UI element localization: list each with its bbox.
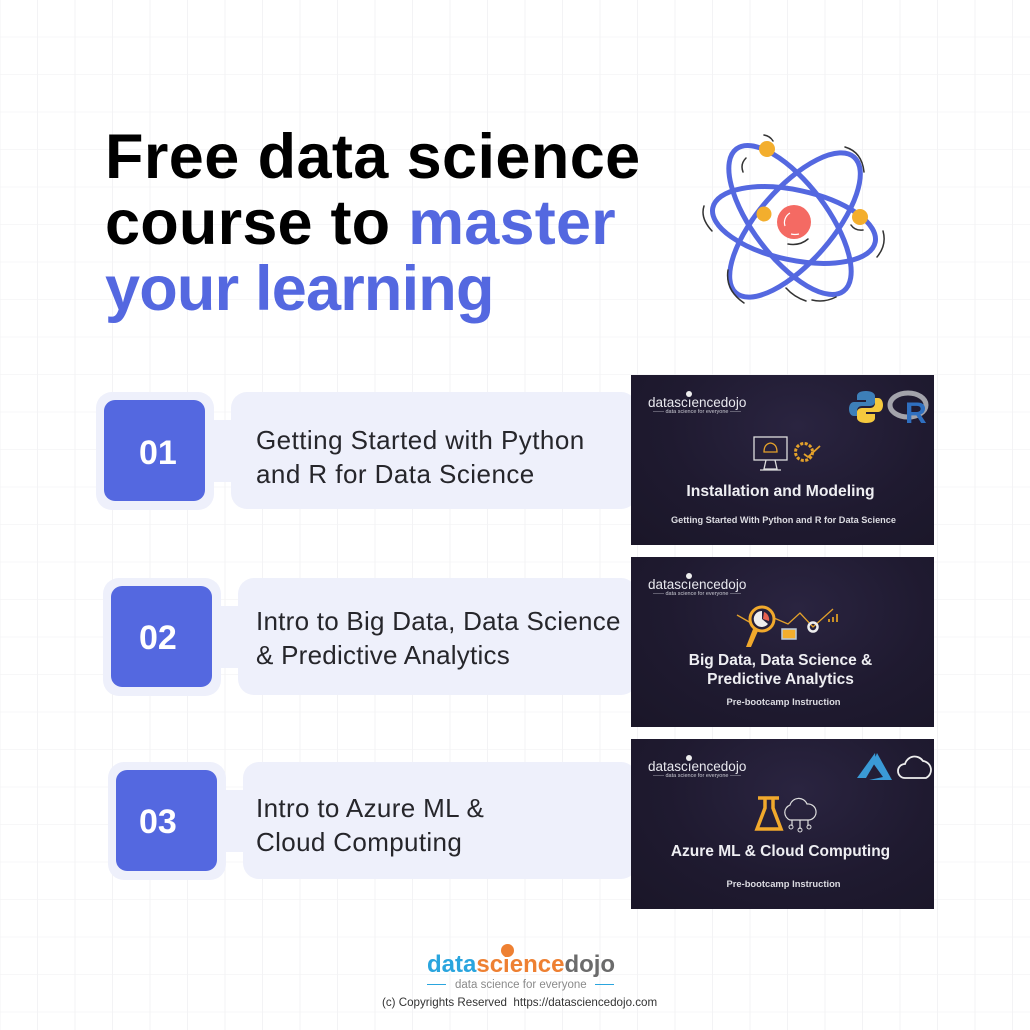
step 1 text: Getting Started with Python [256,425,585,455]
heading: Predictive Analytics [707,671,854,688]
step 2 text [256,606,621,670]
step 3 text: Cloud Computing [256,827,462,857]
copyright: (c) Copyrights Reserved https://datasciencedojo.com [382,996,657,1009]
footer logo [427,944,615,991]
step 1 text [256,425,585,489]
step 2 connector [214,606,244,668]
step 2 text: & Predictive Analytics [256,640,510,670]
thumbnail tagline: —— data science for everyone —— [653,409,741,415]
logo dot [501,944,514,957]
thumbnail tagline: —— data science for everyone —— [653,773,741,779]
flask and cloud icon [754,796,817,832]
step 1 text pill [231,392,637,509]
analytics icon [736,606,838,647]
step 1 connector [207,420,237,482]
python and R logos [849,390,928,426]
step 3 [108,762,631,880]
step 2 thumbnail [631,557,934,727]
step 1 [96,392,631,510]
step 2 text: Intro to Big Data, Data Science [256,606,621,636]
step 1 number: 01 [139,434,177,472]
step 3 text [256,793,484,857]
subheading: Pre-bootcamp Instruction [726,696,841,707]
step 3 text: Intro to Azure ML & [256,793,484,823]
logo wordmark: datasciencedojo [427,951,615,978]
title: your learning [105,254,494,324]
title: Free data science [105,122,641,192]
step 3 number [116,770,217,871]
step 3 text pill [243,762,637,879]
heading [689,652,872,688]
heading: Installation and Modeling [686,483,875,500]
title [105,122,641,324]
title: course to master [105,188,616,258]
thumbnail brand: datascıencedojo [648,759,746,774]
step 3 number: 03 [139,803,177,841]
step 3 thumbnail [631,739,934,909]
step 3 connector [219,790,249,852]
step 3 number halo [108,762,226,880]
step 2 number: 02 [139,619,177,657]
monitor and gear icon [753,436,820,471]
step 2 text pill [238,578,637,695]
icon: atom [702,134,885,304]
step 1 number halo [96,392,214,510]
logo right dash [595,984,614,985]
step 1 number [104,400,205,501]
thumbnail brand: datascıencedojo [648,577,746,592]
thumbnail brand: datascıencedojo [648,395,746,410]
step 1 text: and R for Data Science [256,459,535,489]
logo left dash [427,984,446,985]
thumbnail logo dot [686,573,692,579]
thumbnail logo dot [686,755,692,761]
thumbnail logo dot [686,391,692,397]
step 2 number halo [103,578,221,696]
heading: Azure ML & Cloud Computing [671,843,890,860]
subheading: Getting Started With Python and R for Data Science [671,515,896,525]
thumbnail tagline: —— data science for everyone —— [653,591,741,597]
step 2 number [111,586,212,687]
step 1 thumbnail [631,375,934,545]
step 2 [103,578,631,696]
azure and cloud logos [857,753,932,780]
heading: Big Data, Data Science & [689,652,872,669]
logo tagline: data science for everyone [455,979,587,991]
subheading: Pre-bootcamp Instruction [726,878,841,889]
